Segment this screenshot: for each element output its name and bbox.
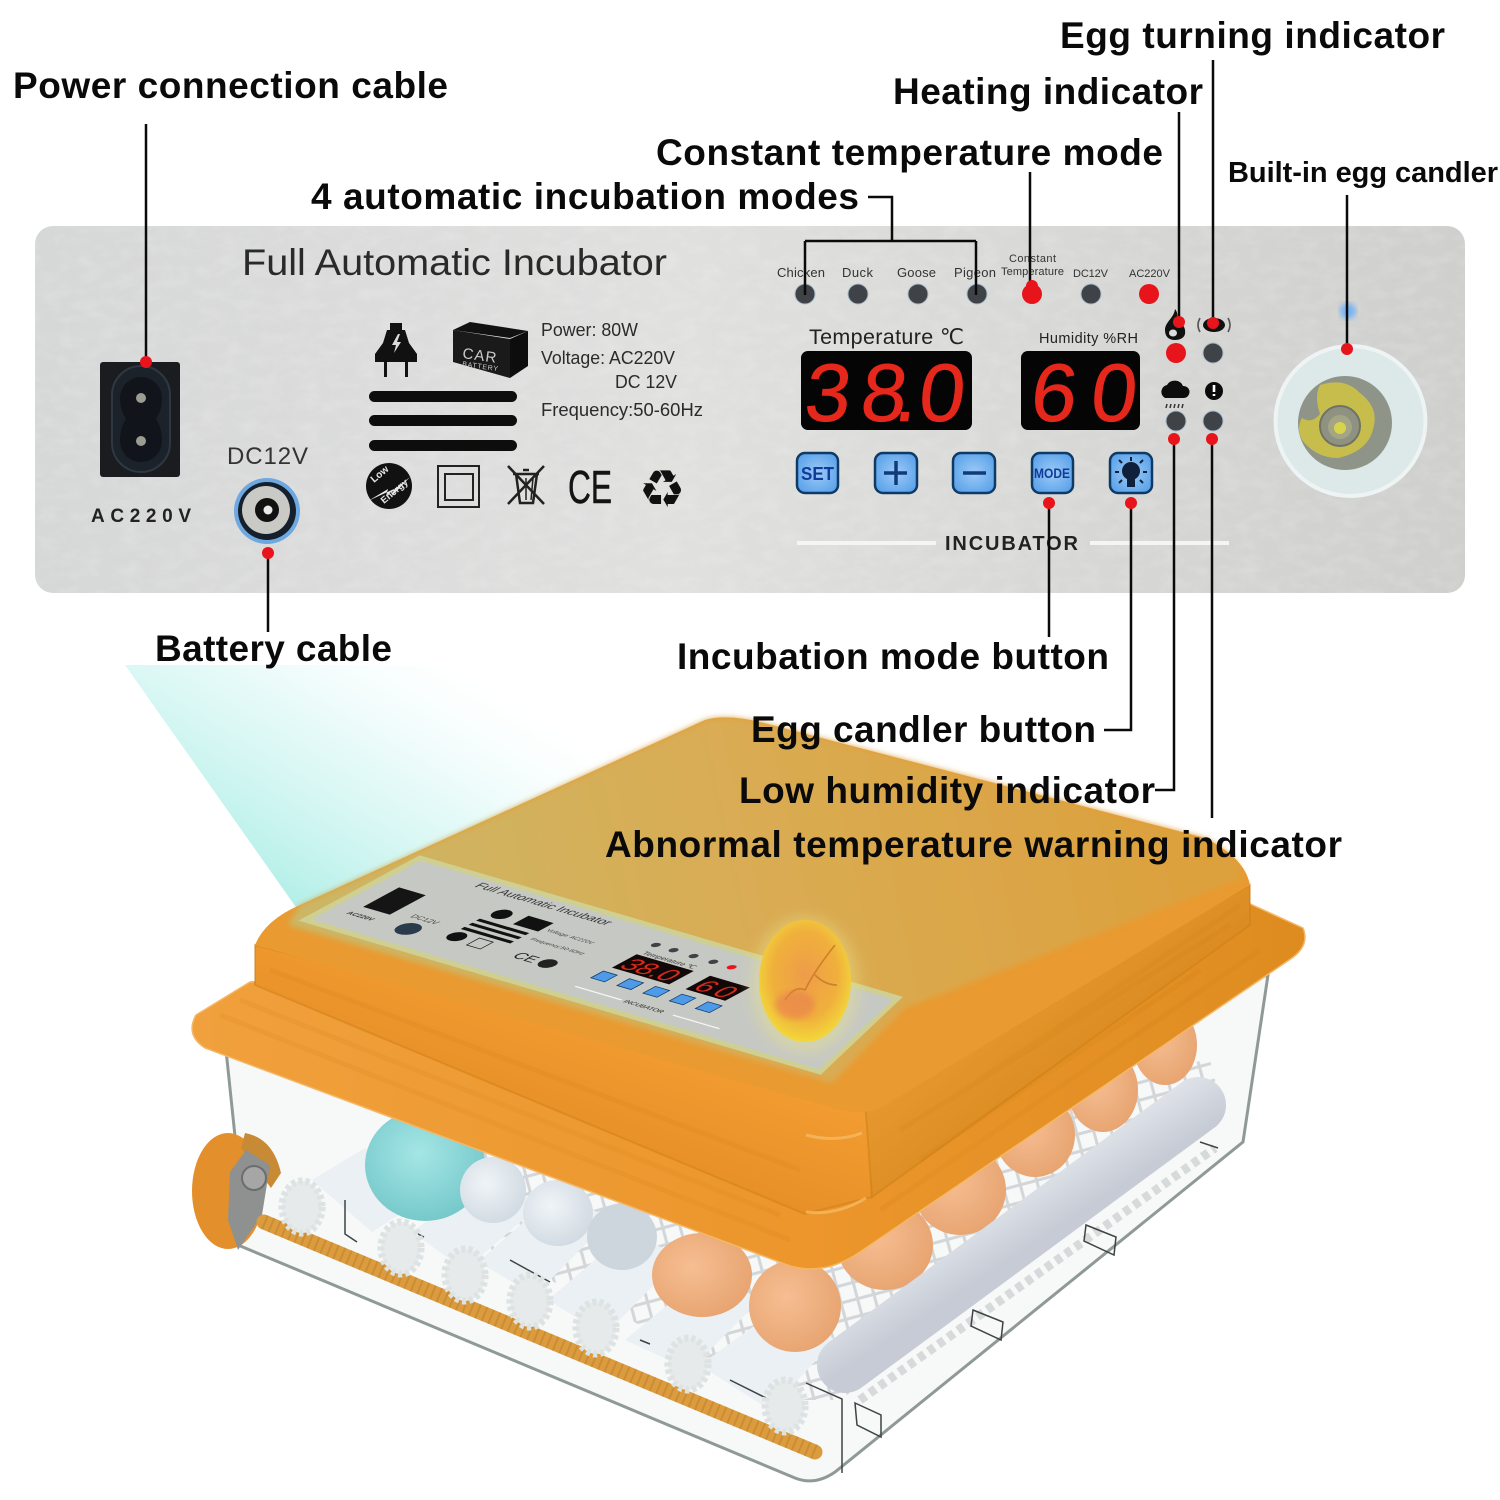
worm drive rod [264, 1222, 815, 1452]
icon: recycle: ♻ [639, 460, 685, 520]
rollers [312, 1148, 835, 1410]
lid top face [288, 717, 1242, 1083]
mode indicator lights [795, 284, 1159, 304]
label: heating indicator: Heating indicator [893, 71, 1203, 112]
label: egg candler: Built-in egg candler [1228, 157, 1498, 189]
callout: battery cable line [262, 547, 274, 632]
rear eggs [837, 1005, 1197, 1290]
transparent base [226, 975, 1268, 1481]
status lights [1166, 343, 1223, 431]
button: plus [875, 453, 917, 493]
icon: car battery [453, 322, 528, 378]
specification text [541, 320, 703, 420]
mode names: AC220V [1129, 268, 1171, 280]
button: MODE: MODE [1034, 465, 1070, 481]
specification text: Frequency:50-60Hz [541, 400, 703, 420]
label: low humidity: Low humidity indicator [739, 770, 1155, 811]
mini panel contents: Full Automatic Incubator [471, 881, 618, 927]
lid streaks [220, 905, 1260, 1240]
mini panel contents: Temperature ℃ [640, 950, 699, 970]
status icons [1161, 309, 1230, 431]
icon: plug [375, 323, 417, 377]
motor [192, 1133, 281, 1250]
label: incubation modes: 4 automatic incubation modes [311, 176, 859, 217]
mode names: Temperature [1001, 266, 1064, 278]
INCUBATOR divider [797, 533, 1229, 555]
callout: candler line [1341, 195, 1353, 355]
DC label: DC12V [227, 443, 308, 470]
button: SET: SET [801, 464, 834, 484]
mini panel contents: 60 [686, 977, 747, 1001]
icon: low energy: Low [369, 464, 391, 485]
mini panel contents: DC12V [408, 913, 443, 926]
humidity display: 60 [1027, 348, 1142, 439]
callout: incubation modes bracket [805, 197, 976, 295]
callout: heating line [1173, 112, 1185, 328]
buttons [797, 453, 1152, 493]
callout: constant temperature line [1026, 172, 1038, 292]
egg tray mesh [330, 1060, 1225, 1400]
button: MODE [1032, 453, 1073, 493]
icon: low energy: Energy [379, 477, 411, 506]
lid bevel [255, 717, 1250, 1112]
socket label: AC220V [91, 506, 191, 527]
icon: CE mark: CE [568, 461, 612, 513]
mini panel contents: Frequency:50-60Hz [528, 937, 587, 956]
icon: AC power socket [100, 362, 180, 477]
callout: abnormal temperature line [1206, 433, 1218, 818]
mini panel contents: INCUBATOR [621, 1000, 666, 1014]
icon: egg turning [1198, 318, 1230, 332]
mini panel contents: AC220V [344, 911, 376, 922]
mode names: Duck [842, 265, 874, 280]
mini panel contents: Voltage: AC220V [544, 929, 596, 945]
mini panel contents [335, 866, 814, 1031]
side wall tabs [345, 1142, 1218, 1473]
humidity heading: Humidity %RH [1039, 331, 1138, 347]
lid right face [865, 885, 1250, 1197]
label: egg candler button: Egg candler button [751, 709, 1096, 750]
label: constant temperature mode: Constant temperature mode [656, 132, 1163, 173]
callout: egg turning line [1207, 60, 1219, 329]
specification bars [369, 391, 517, 451]
panel: incubator product [192, 717, 1305, 1481]
INCUBATOR divider: INCUBATOR [945, 533, 1079, 555]
light beam from nameplate to panel [125, 665, 900, 998]
label: egg turning indicator: Egg turning indicator [1060, 15, 1445, 56]
specification text: Power: 80W [541, 320, 638, 340]
corner highlight [806, 1133, 866, 1213]
icon: warning [1205, 382, 1223, 400]
specification text: Voltage: AC220V [541, 348, 675, 368]
mode names: DC12V [1073, 268, 1109, 280]
callout: mode button line [1043, 497, 1055, 637]
side tube [845, 1105, 1198, 1365]
label: incubation mode button: Incubation mode button [677, 636, 1109, 677]
icon: DC jack [234, 478, 300, 544]
label: abnormal temperature: Abnormal temperature warning indicator [605, 824, 1342, 865]
specification text: DC 12V [615, 372, 677, 392]
callout lines and dots [140, 60, 1353, 818]
button: minus [953, 453, 995, 493]
callout: candler button line [1104, 497, 1137, 730]
mode names: Chicken [777, 265, 825, 280]
lid left face [255, 945, 872, 1214]
gears [282, 1181, 805, 1432]
button: SET [797, 453, 838, 493]
built-in egg candler [1276, 346, 1426, 496]
lid flange [192, 903, 1305, 1269]
icon: WEEE bin [508, 466, 544, 504]
icon: low energy [366, 463, 412, 509]
side rail [860, 1148, 1215, 1400]
mode names [777, 253, 1171, 280]
nameplate [305, 858, 898, 1072]
icon: rain cloud [1161, 381, 1190, 408]
temperature display: 38.0 [801, 348, 970, 439]
icon: car battery: CAR [461, 345, 498, 367]
candled egg [751, 917, 859, 1053]
panel: control panel enlarged [35, 226, 1465, 593]
callout: low humidity line [1155, 433, 1180, 790]
label: battery cable: Battery cable [155, 628, 392, 669]
icon: flame [1165, 309, 1185, 340]
callout: power cable line [140, 124, 152, 368]
icon: car battery: BATTERY [462, 361, 499, 373]
mode names: Goose [897, 265, 936, 280]
icon: blue spark [1340, 303, 1356, 319]
label: power cable: Power connection cable [13, 65, 448, 106]
icon: double insulation [438, 466, 479, 507]
temperature heading: Temperature ℃ [809, 325, 964, 349]
mode names: Pigeon [954, 265, 996, 280]
mode names: Constant [1009, 253, 1056, 265]
mini panel contents: 38.0 [612, 955, 690, 985]
eggs [365, 1109, 841, 1352]
button: candler bulb [1110, 453, 1152, 493]
mini panel contents: CE [508, 951, 543, 965]
panel title: Full Automatic Incubator [242, 242, 667, 283]
